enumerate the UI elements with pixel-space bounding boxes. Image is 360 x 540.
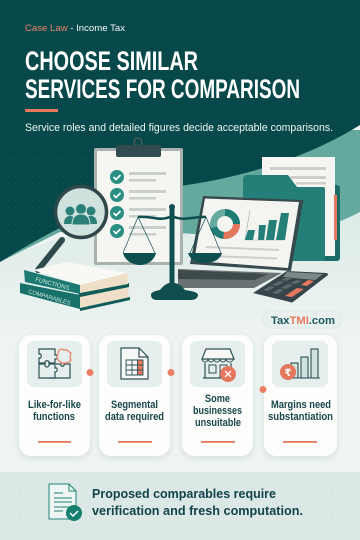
card: segmental data required xyxy=(99,335,170,456)
keyboard base xyxy=(178,269,282,288)
book label: functions: FUNCTIONS xyxy=(34,277,70,292)
people icon xyxy=(64,204,97,225)
header text xyxy=(25,23,333,134)
dark teal header background xyxy=(0,0,360,262)
callout text: verification and fresh computation. xyxy=(92,503,303,518)
connectors xyxy=(86,369,266,393)
bar chart xyxy=(245,210,289,240)
label xyxy=(105,399,164,423)
panel: bottom callout xyxy=(0,472,360,540)
donut chart xyxy=(214,212,236,236)
title: CHOOSE SIMILAR xyxy=(25,46,198,76)
checklist xyxy=(110,170,166,238)
label: Some xyxy=(205,393,230,405)
label: businesses xyxy=(193,405,242,417)
label xyxy=(28,399,81,423)
illustration: documents and folder xyxy=(243,157,340,261)
accent rule xyxy=(25,109,58,112)
card: like-for-like functions xyxy=(19,335,90,456)
callout text xyxy=(92,486,303,518)
illustration: stacked books xyxy=(20,262,130,311)
TaxTMI badge: TaxTMI.com xyxy=(271,315,335,327)
TaxTMI badge xyxy=(263,311,342,328)
subtitle: Service roles and detailed figures decide acceptable comparisons. xyxy=(25,122,333,134)
icon: document with check xyxy=(49,484,82,521)
icon: bars with rupee: ₹ xyxy=(285,368,292,379)
label: functions xyxy=(33,411,75,423)
label xyxy=(193,393,242,429)
icon: store with cross xyxy=(202,349,236,382)
label: data required xyxy=(105,411,164,423)
illustration: magnifier with people xyxy=(38,186,106,270)
light desk surface xyxy=(0,212,360,340)
icon: spreadsheet document xyxy=(121,348,148,379)
label: Margins need xyxy=(271,399,331,411)
icon: puzzle xyxy=(39,349,71,378)
illustration: balance scale xyxy=(123,204,222,300)
eyebrow: Case Law - Income Tax xyxy=(25,23,125,34)
card: some businesses unsuitable xyxy=(182,335,253,456)
mid teal background band xyxy=(0,130,360,262)
callout text: Proposed comparables require xyxy=(92,486,276,501)
label: substantiation xyxy=(268,411,333,423)
book label: comparables: COMPARABLES xyxy=(27,289,71,307)
dot pattern xyxy=(0,156,95,258)
card: margins need substantiation xyxy=(264,335,337,456)
label: Like-for-like xyxy=(28,399,81,411)
illustration: calculator xyxy=(253,271,328,302)
illustration: laptop xyxy=(178,196,304,288)
label: unsuitable xyxy=(195,417,241,429)
illustration: clipboard xyxy=(94,138,183,265)
label xyxy=(268,399,333,423)
label: Segmental xyxy=(111,399,158,411)
title xyxy=(25,46,300,104)
